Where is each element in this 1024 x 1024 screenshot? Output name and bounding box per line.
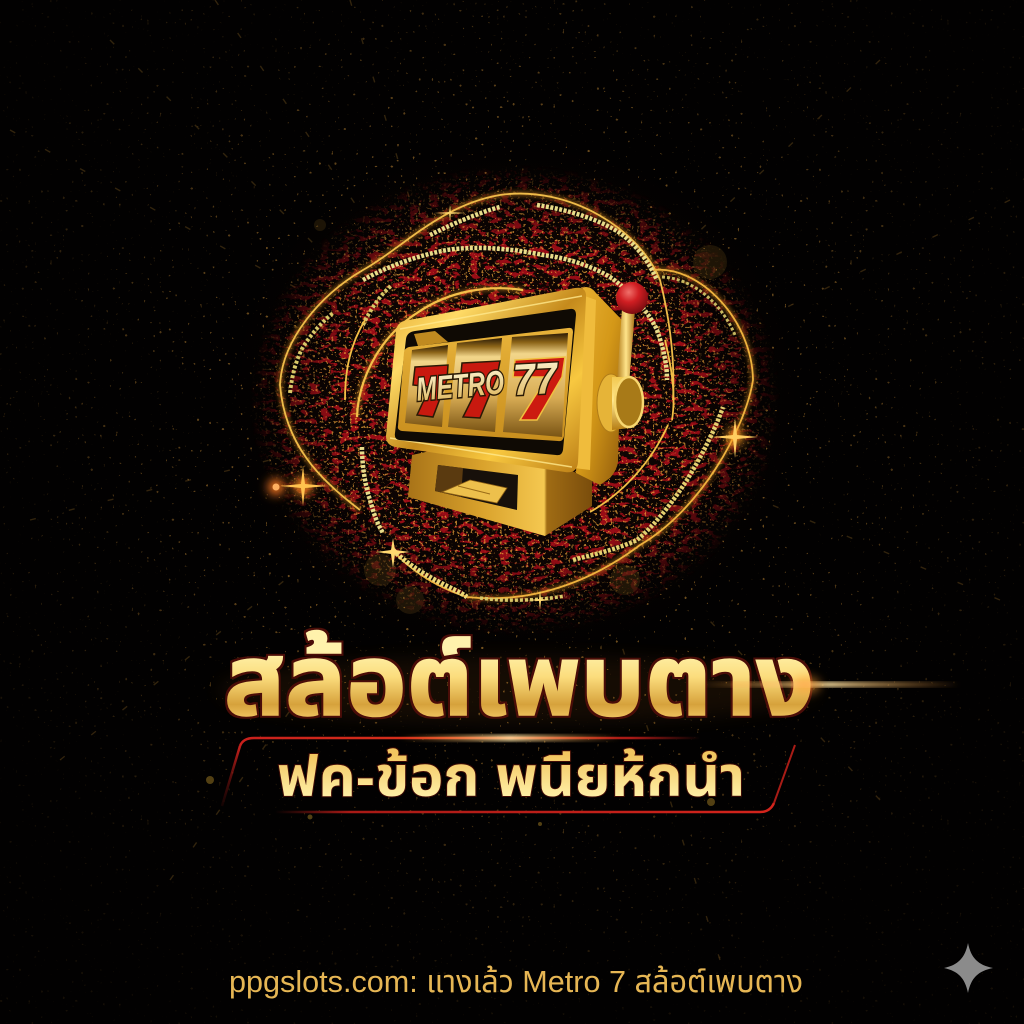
ring: outer left loop: [280, 194, 673, 510]
central glow: [205, 120, 825, 680]
logo text: METRO: [415, 363, 506, 408]
bokeh orbs: [314, 219, 727, 614]
subtitle panel: [222, 738, 795, 812]
frame highlight: [390, 296, 582, 467]
slot machine: [386, 282, 648, 536]
reel frame: [398, 328, 573, 441]
sparkle: right: [712, 418, 758, 458]
panel left edge: [222, 746, 240, 806]
sparkle: left: [268, 466, 328, 506]
bokeh dots near title: [206, 776, 715, 826]
panel right edge: [774, 745, 795, 803]
machine side: [576, 287, 622, 485]
panel flare: [400, 735, 620, 741]
panel top edge: [240, 738, 700, 746]
ring: dotted right loop: [662, 277, 735, 335]
lever ball: [616, 282, 648, 314]
ring: dotted inner upper left: [363, 285, 392, 325]
seven 3: [513, 357, 565, 420]
orbit rings: [280, 194, 753, 600]
ring: arcs near machine: [345, 320, 674, 512]
ring: dotted middle: [363, 248, 667, 380]
title: สล้อต์เพบตาง: [224, 625, 814, 737]
coin slot: [435, 465, 518, 510]
ring: dotted bottom: [480, 596, 565, 600]
logo number: 77: [512, 354, 560, 405]
base: [408, 440, 592, 536]
window highlight: [414, 331, 448, 346]
ring: dotted upper left: [290, 313, 333, 393]
sparkle: bottom: [376, 538, 410, 568]
lever: [597, 282, 648, 432]
reel window: [395, 309, 576, 455]
subtitle: ฟค-ข้อก พนียห้กนำ: [277, 745, 745, 808]
side highlight: [574, 295, 596, 470]
circuit pattern: gold particles: [240, 160, 790, 640]
ring: dotted bottom left: [393, 550, 467, 597]
ring: inner arc: [357, 288, 523, 417]
circuit pattern: red: [240, 160, 790, 640]
ring: dotted inner left: [362, 447, 383, 533]
gold coins: [442, 480, 507, 503]
title glow: [218, 656, 818, 724]
lever hub: [597, 374, 625, 432]
reel 1: [405, 345, 448, 427]
ring: right loop: [393, 270, 753, 598]
icon: four-point star: [944, 943, 993, 993]
ring: dotted lower right: [573, 407, 723, 560]
seven 1: [413, 365, 448, 417]
ring: dotted top: [430, 205, 657, 280]
reel 3: [503, 333, 568, 437]
panel bottom edge: [275, 803, 774, 812]
reel 2: [448, 338, 502, 432]
sparkle: lower: [528, 590, 552, 610]
sparkle: top: [434, 205, 466, 221]
title flare: [700, 677, 960, 693]
ring glow: [280, 194, 753, 598]
seven 2: [460, 361, 500, 418]
machine front frame: [386, 288, 586, 472]
footer caption: ppgslots.com: แางเล้ว Metro 7 สล้อต์เพบตาง: [229, 964, 803, 999]
